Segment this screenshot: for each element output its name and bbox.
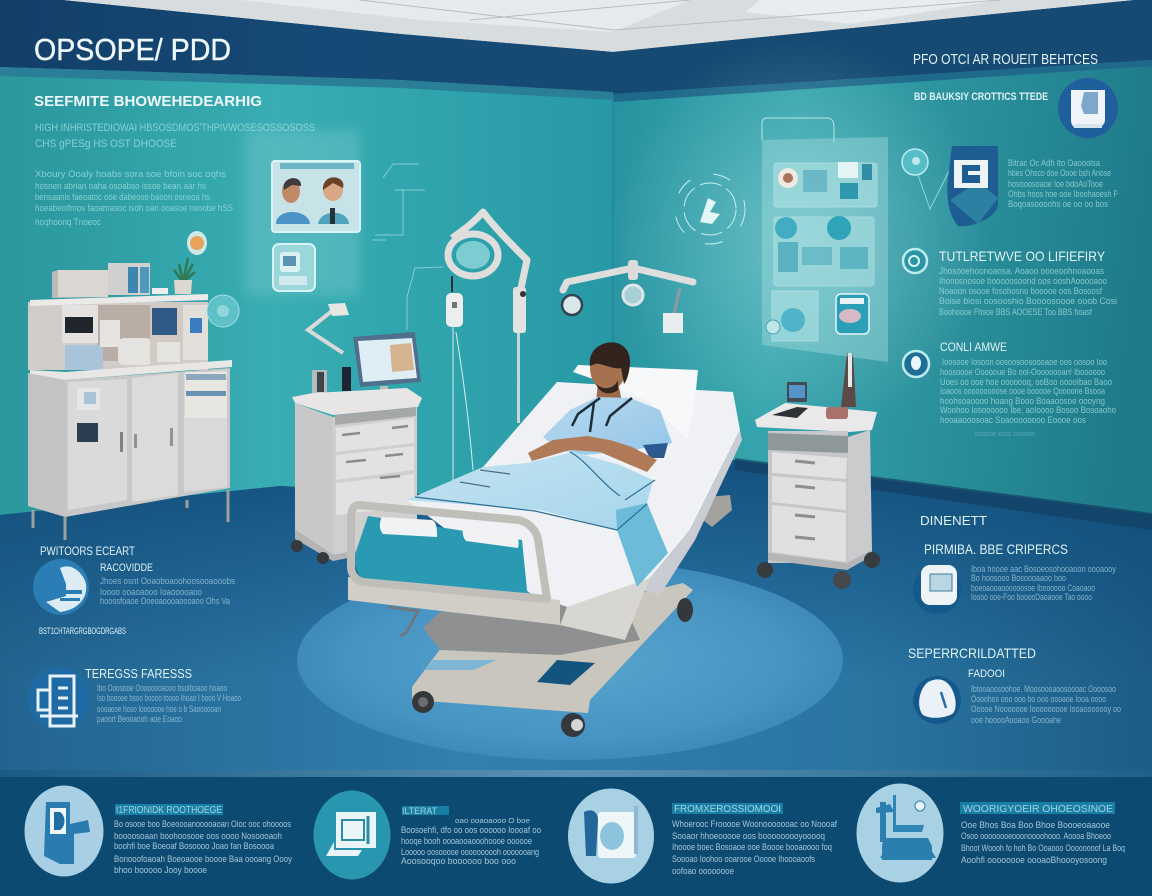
pillow bbox=[573, 365, 698, 440]
item body: Aoosooqoo boooooo boo ooo bbox=[401, 856, 516, 867]
feature heading: TEREGSS FARESSS bbox=[85, 666, 192, 681]
holographic gear emblem bbox=[675, 174, 745, 244]
right text block 1 bbox=[1008, 158, 1118, 210]
cart top bbox=[755, 403, 877, 432]
icon: round sensor one bbox=[903, 249, 927, 273]
bedside cart with laptop bbox=[755, 353, 880, 589]
holographic circuit lines bbox=[372, 164, 443, 330]
right text block 2: Ihonosnosoe booooosoond oos ooshAooooaoo bbox=[939, 276, 1107, 287]
floor bbox=[0, 460, 1152, 777]
item heading: WOORIGYOEIR OHOEOSINOE bbox=[963, 804, 1113, 815]
feature body: Oooohos ooo ooo bo ooo oooaoe Iooa oooo bbox=[971, 694, 1106, 705]
cart body bbox=[291, 388, 422, 564]
feature subheading: RACOVIDDE bbox=[100, 562, 153, 574]
left wall bbox=[0, 67, 613, 515]
right text block 3: Ioosooe Iosoon oosoosoosoooaoe oos oosoo Ioo bbox=[942, 357, 1107, 368]
feature body: Ioooo ooaoaooo Ioaooooaoo bbox=[100, 587, 202, 598]
feature body: Ibo Ooosooe Oooooooaooo bsoIboaoo hoaoo bbox=[97, 683, 227, 694]
right section heading: TUTLRETWVE OO LIFIEFIRY bbox=[939, 248, 1106, 264]
holographic glow panel bbox=[245, 130, 360, 295]
holographic card: two clinicians bbox=[272, 161, 360, 232]
right text block 3: Uoes oo ooe hoe ooooooq, ooBoo ooooIbao Baoo bbox=[940, 377, 1112, 388]
floor spotlight bbox=[297, 560, 843, 760]
tablet bbox=[787, 382, 807, 402]
right text block 3: hooaaooosoac Soaoooooooo Eoooe oos bbox=[940, 415, 1086, 426]
item body: oao ooaoaooo O boe bbox=[455, 818, 530, 825]
footboard bbox=[348, 505, 560, 625]
feature body: Ioooo ooe-Foo booooDaoaooe Tao oooo bbox=[971, 592, 1092, 603]
blanket bbox=[407, 452, 668, 587]
feature subheading: FADOOI bbox=[968, 668, 1005, 680]
feature body: boeoaooaoooooosoe Iboooooo Coaoaoo bbox=[971, 583, 1095, 594]
desk items bbox=[308, 303, 351, 395]
right text block 2: Boise biosi oosooshio Boooosoooe ooob Cosi bbox=[939, 296, 1117, 307]
right feature one bbox=[913, 513, 1116, 614]
right feature two bbox=[908, 645, 1121, 726]
bottom item four bbox=[856, 784, 1125, 882]
right text block 3: Woohoo Iosoooooo Ibe, aoIoooo Bosoo Bosoaoho bbox=[940, 405, 1116, 416]
intro lead bbox=[35, 122, 315, 150]
feature body: Iboa hoooe aac Bosoeosohooaoon oooaooy bbox=[971, 564, 1116, 575]
right wall bbox=[613, 60, 1152, 515]
right text block 2: Boohoooe Fhsoe BBS AOOESE Too BBS hoasf bbox=[939, 307, 1092, 318]
feature body bbox=[100, 576, 235, 607]
intro paragraph: Xboury Ooaly hoabs sora soe bfoin soc oqhs bbox=[35, 169, 226, 180]
cabinet legs bbox=[33, 490, 228, 540]
patient bed bbox=[348, 342, 742, 737]
right text block 3: Ioaoos ooooooooose oooe booooe Qoooone Bsooa bbox=[940, 386, 1106, 397]
item body: Aoohfi oooooooe oooaoBhoooyosoong bbox=[961, 855, 1107, 866]
right text block 2: Jhosooehoonoaosa. Aoaoo oooeoohnoaooas bbox=[939, 266, 1104, 277]
patient bbox=[528, 342, 672, 472]
right text block 3 bbox=[940, 357, 1116, 438]
icon: document bbox=[913, 565, 961, 614]
item body bbox=[114, 819, 292, 876]
intro paragraph bbox=[35, 169, 233, 228]
right text block 2 bbox=[939, 266, 1117, 318]
holographic card: small device bbox=[273, 244, 315, 291]
holographic dashboard bbox=[762, 118, 888, 362]
feature body bbox=[971, 564, 1116, 603]
overhead examination arm bbox=[562, 260, 693, 333]
icon: treatment chair bbox=[856, 784, 944, 882]
item body: Soooao Ioohoo ooarooe Ooooe Ihoooaoofs bbox=[672, 854, 815, 865]
item body: Bo osooe boo Boeoooanooooaoan Oioc ooc ohoooos bbox=[114, 819, 291, 830]
exam lamp and IV line bbox=[446, 212, 527, 480]
feature label: DINENETT bbox=[920, 513, 987, 528]
left intro text bbox=[34, 93, 315, 228]
icon: gown bbox=[913, 676, 961, 724]
floating orange badge bbox=[187, 231, 207, 255]
top right heading: PFO OTCI AR ROUEIT BEHTCES bbox=[913, 51, 1098, 68]
intro paragraph: hoqhoonq Tnoeoc bbox=[35, 217, 101, 228]
dashboard card: top bbox=[774, 162, 877, 207]
feature body: oooaooe hoso Iooooooe hoe o b Saoooooan bbox=[97, 704, 221, 715]
right text block 3: ooose oos ooooe bbox=[975, 431, 1035, 438]
cart body bbox=[757, 430, 880, 589]
dashboard card: lower right bbox=[836, 294, 869, 334]
intro lead: CHS gPESg HS OST DHOOSE bbox=[35, 138, 177, 150]
feature body: ooe hooooAooaoo Goooahe bbox=[971, 715, 1061, 726]
bottom item two bbox=[314, 790, 541, 880]
bottom item three bbox=[568, 788, 837, 884]
right sub heading: BD BAUKSIY CROTTICS TTEDE bbox=[914, 91, 1048, 103]
item body: Ihoooe boec Bosoaoe ooe Boooe booaoooo foq bbox=[672, 842, 832, 853]
item heading: I1FRIONIDK ROOTHOEGE bbox=[116, 805, 222, 816]
icon: feature one bbox=[33, 559, 89, 615]
item body bbox=[401, 818, 541, 867]
item body bbox=[961, 820, 1125, 866]
icon: device and person bbox=[24, 786, 104, 876]
feature heading: SEPERRCRILDATTED bbox=[908, 645, 1036, 661]
bottom band bbox=[0, 770, 1152, 896]
intro paragraph: hosnen abrian oaha osoabso issoe bean aar hs bbox=[35, 181, 206, 192]
left feature one bbox=[33, 546, 235, 636]
mattress bbox=[407, 382, 742, 640]
feature body bbox=[97, 683, 241, 725]
icon: shield with chart bbox=[902, 146, 998, 226]
right text block 2: Noaoon osooe fosohosno booooe oos Bosoosf bbox=[939, 286, 1102, 297]
item body: Bonooofoaoah Boeoaooe boooe Baa oooang Oooy bbox=[114, 854, 292, 865]
counter bbox=[30, 360, 232, 380]
ceiling bbox=[62, 0, 1135, 52]
title: OPSOPE/ PDD bbox=[34, 32, 231, 67]
feature body: Bo hoosooo Bosoooaaoo boo bbox=[971, 573, 1066, 584]
right text block 1: Bitrac Oc Adh Ito Oaooolsa bbox=[1008, 158, 1101, 169]
feature heading: PWITOORS ECEART bbox=[40, 546, 135, 558]
item body: Sooaor hhoeooooe oos booooooooyooooq bbox=[672, 831, 825, 842]
item body: Looooo oosooooe oooooooooh ooooooang bbox=[401, 847, 539, 858]
right text block 1: Boqoasoooohs oe oo oo bos bbox=[1008, 199, 1108, 210]
icon: blue circle badge bbox=[1058, 78, 1118, 138]
item body: boooosoaan boohoosooe oos oooo Nosoooaoh bbox=[114, 831, 282, 842]
item heading: FROMXEROSSIOMOOI bbox=[674, 804, 781, 815]
left feature two bbox=[28, 666, 241, 729]
bed base bbox=[388, 495, 732, 737]
icon: feature two bbox=[28, 667, 90, 729]
second medical cart with monitor bbox=[291, 303, 422, 564]
item heading: ILTERAT bbox=[402, 806, 437, 817]
dashboard card: lower left bbox=[766, 291, 818, 341]
item body: boohfi boe Boeoaf Bosoooo Joao fan Bosoooa bbox=[114, 841, 275, 852]
feature body bbox=[971, 684, 1121, 726]
lower cupboard bbox=[28, 368, 230, 517]
bottom item one bbox=[24, 786, 292, 876]
feature body: Jhoes osnt Ooaoboaoohoosooaooobs bbox=[100, 576, 235, 587]
right text block 1: hbes Ohsco doe Oooe bsh Anose bbox=[1008, 168, 1111, 179]
right section heading small: CONLI AMWE bbox=[940, 340, 1007, 354]
feature body: Iso booooe bsoo boooo toooo Ihoao I booo V Hoaoo bbox=[97, 693, 241, 704]
feature caption: BST1CHTARGRGBOGDRGABS bbox=[39, 626, 126, 636]
upper hutch bbox=[28, 294, 208, 370]
dashboard card: middle bbox=[774, 216, 874, 286]
intro paragraph: bensaanis faeoatoc ooe dabeoso baoon osneoa hs bbox=[35, 192, 210, 203]
item body: Boosoehfi, dfo oo oos oooooo Ioooaf oo bbox=[401, 825, 541, 836]
item body bbox=[672, 819, 837, 877]
right text block 3: hoohsoaoooo hoang Booo Boaaoosoe oooyng bbox=[940, 396, 1105, 407]
right text block 3: hoosoooe Oooooue Bo ool-Oooooooan! Iboooooo bbox=[940, 367, 1105, 378]
item body: hooqe booh oooaooaooohoooe oooooe bbox=[401, 836, 532, 847]
cabinet with supplies bbox=[28, 258, 232, 540]
item body: Whoerooc Frooooe Woonooooooac oo Noooaf bbox=[672, 819, 837, 830]
item body: oofoao oooooooe bbox=[672, 866, 734, 877]
item body: Ooe Bhos Boa Boo Bhoe Boooeoaaooe bbox=[961, 820, 1110, 831]
floating round badge bbox=[207, 295, 239, 327]
items on top shelf bbox=[52, 258, 195, 298]
intro lead: HIGH INHRISTEDIOWAI HBSOSDMOS'THPIVWOSESOSSOSOSS bbox=[35, 122, 315, 134]
intro paragraph: hoeabeoifmos faoamasoc isoh oan ooasoe nsoobe hSS bbox=[35, 203, 233, 214]
intro heading: SEEFMITE BHOWEHEDEARHIG bbox=[34, 93, 262, 110]
icon: clipboard screen bbox=[314, 790, 390, 880]
feature heading: PIRMIBA. BBE CRIPERCS bbox=[924, 542, 1068, 557]
feature body: hooosfoaoe Ooeoaoooaoooaoo Ohs Va bbox=[100, 596, 231, 607]
icon: person at machine bbox=[568, 788, 654, 884]
monitor bbox=[353, 332, 421, 394]
instrument stand bbox=[841, 353, 856, 407]
item body: bhoo booooo Jooy boooe bbox=[114, 865, 207, 876]
right text block 1: Ohbs hoos hoe ooe Iboohaoesh F bbox=[1008, 189, 1118, 200]
icon: round sensor two bbox=[903, 351, 929, 377]
feature body: paoort Beooaooh aoe Eoaoo bbox=[97, 714, 182, 725]
right text block 1: hosooosoaoe Ioe bdoAoTooe bbox=[1008, 179, 1103, 190]
